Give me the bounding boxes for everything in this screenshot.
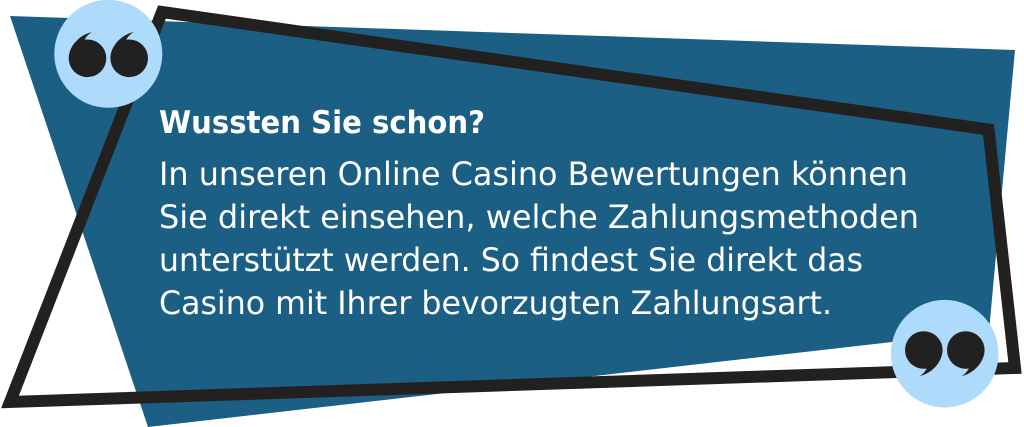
body text: unterstützt werden. So findest Sie direkt das [159,241,863,279]
body text: Sie direkt einsehen, welche Zahlungsmethoden [159,198,919,236]
body text: Casino mit Ihrer bevorzugten Zahlungsart. [159,284,832,322]
heading: Wussten Sie schon? [159,105,485,141]
body text: In unseren Online Casino Bewertungen können [159,155,908,193]
icon: opening quotation marks [54,0,162,108]
icon: closing quotation marks [891,300,998,408]
body text [159,155,919,322]
